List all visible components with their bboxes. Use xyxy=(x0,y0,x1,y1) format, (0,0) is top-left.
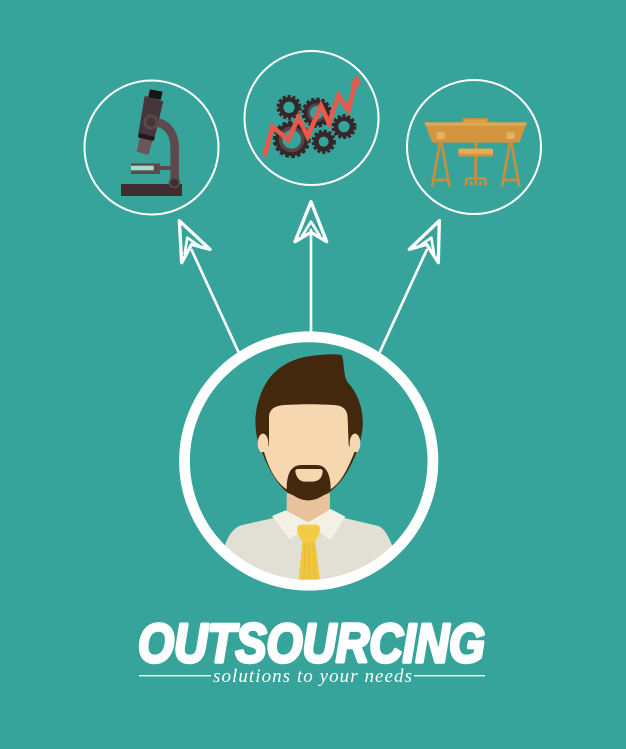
mouth xyxy=(295,469,323,482)
arrow: center xyxy=(295,202,327,332)
arrow: right xyxy=(380,221,439,352)
portrait: man in ring xyxy=(185,337,433,585)
title: OUTSOURCING xyxy=(138,612,485,674)
outsourcing infographic xyxy=(84,50,542,686)
neck xyxy=(287,493,330,523)
tie xyxy=(299,540,320,580)
ears xyxy=(258,434,268,453)
collar xyxy=(272,509,345,540)
hair xyxy=(255,354,363,454)
icon: microscope in circle xyxy=(84,80,218,214)
icon: gears and growth arrow in circle xyxy=(244,51,378,185)
face xyxy=(264,404,354,495)
beard xyxy=(287,465,331,500)
tagline with rules: solutions to your needs xyxy=(213,666,412,687)
icon: desk and stool in circle xyxy=(407,80,541,214)
shirt xyxy=(225,518,392,580)
arrow: left xyxy=(179,221,238,352)
jaw outline xyxy=(262,452,357,501)
